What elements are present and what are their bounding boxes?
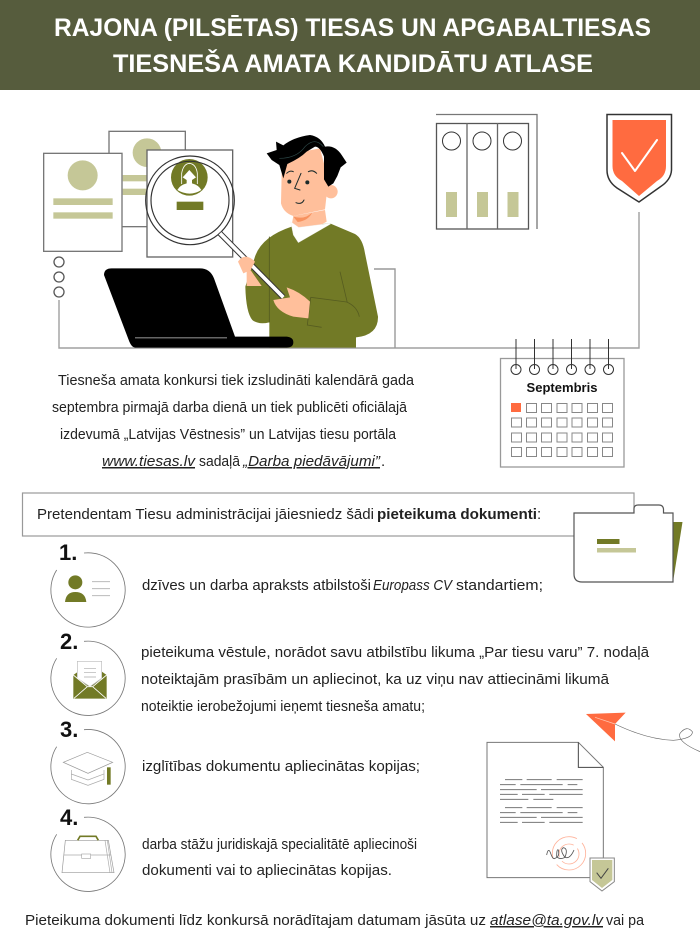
documents heading box: :: [537, 506, 541, 523]
icon: briefcase: [51, 817, 125, 891]
desk outline: [374, 269, 395, 348]
icon: orange shield with check: [607, 114, 672, 202]
item 3: [51, 717, 420, 804]
title banner: RAJONA (PILSĒTAS) TIESAS UN APGABALTIESAS: [54, 14, 651, 42]
icon: folder: [574, 505, 682, 582]
item 1: 1.: [59, 540, 77, 565]
intro paragraph: sadaļā: [199, 453, 241, 470]
item 4: [51, 805, 417, 891]
intro paragraph: septembra pirmajā darba dienā un tiek publicēti oficiālajā: [52, 399, 408, 416]
documents heading box: pieteikuma dokumenti: [377, 506, 537, 523]
intro paragraph: www.tiesas.lv: [102, 453, 197, 470]
item 1: Europass CV: [373, 577, 454, 594]
item 2: noteiktie ierobežojumi ieņemt tiesneša amatu;: [141, 698, 425, 715]
footer text: vai pa: [606, 912, 645, 929]
title banner: [0, 0, 700, 90]
item 4: 4.: [60, 805, 78, 830]
icon: paper plane with trail: [586, 713, 700, 752]
documents heading box: Pretendentam Tiesu administrācijai jāiesniedz šādi: [37, 506, 374, 523]
illustration: CV documents: [44, 131, 233, 257]
item 1: standartiem;: [456, 577, 543, 594]
item 2: noteiktajām prasībām un apliecinot, ka uz viņu nav attiecināmi likumā: [141, 671, 610, 688]
icon: graduation cap: [51, 729, 125, 804]
item 1: [51, 540, 543, 627]
calendar: Septembris: [526, 380, 598, 395]
item 2: [51, 629, 650, 715]
illustration: binders: [436, 114, 537, 229]
illustration: signed document with seal: [487, 742, 614, 891]
intro paragraph: izdevumā „Latvijas Vēstnesis” un Latvijas tiesu portāla: [60, 426, 397, 443]
item 3: izglītības dokumentu apliecinātas kopijas;: [142, 758, 420, 775]
intro paragraph: Tiesneša amata konkursi tiek izsludināti kalendārā gada: [58, 372, 415, 389]
item 2: pieteikuma vēstule, norādot savu atbilstību likuma „Par tiesu varu” 7. nodaļā: [141, 644, 650, 661]
footer text: atlase@ta.gov.lv: [490, 912, 605, 929]
intro paragraph: „Darba piedāvājumi”: [242, 453, 381, 470]
title banner: TIESNEŠA AMATA KANDIDĀTU ATLASE: [113, 48, 593, 78]
illustration: laptop: [104, 268, 293, 348]
item 4: darba stāžu juridiskajā specialitātē apliecinoši: [142, 836, 417, 853]
connector line: [59, 212, 639, 348]
calendar: [500, 339, 624, 467]
icon: three small circles: [54, 257, 64, 297]
item 3: 3.: [60, 717, 78, 742]
item 1: dzīves un darba apraksts atbilstoši: [142, 577, 371, 594]
documents heading box: [22, 493, 634, 536]
item 2: 2.: [60, 629, 78, 654]
item 4: dokumenti vai to apliecinātas kopijas.: [142, 862, 392, 879]
illustration: man with magnifying glass: [146, 135, 378, 348]
icon: envelope: [51, 641, 125, 715]
intro paragraph: [52, 372, 415, 470]
icon: CV person: [51, 553, 125, 627]
intro paragraph: .: [381, 453, 385, 470]
footer text: Pieteikuma dokumenti līdz konkursā norādītajam datumam jāsūta uz: [25, 912, 486, 929]
